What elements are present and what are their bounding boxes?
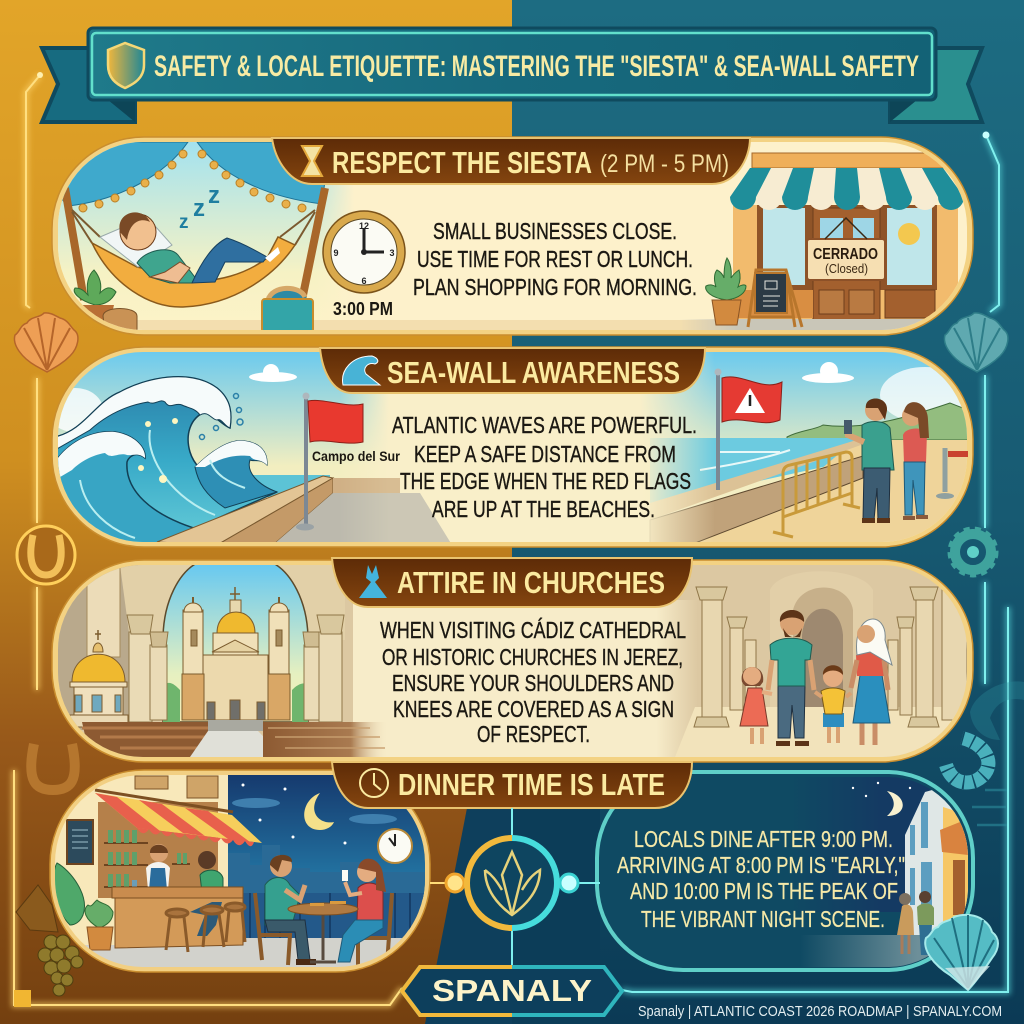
heading: respect the siesta: (2 PM - 5 PM): [600, 150, 729, 178]
panel: dinner text: [597, 772, 973, 970]
illustration: pews: [82, 720, 283, 757]
illustration: distant sea left: [253, 475, 330, 497]
illustration: barrier: [773, 452, 860, 537]
illustration: railing: [240, 893, 428, 940]
body text: churches: [380, 617, 686, 747]
illustration: waves: [55, 377, 277, 545]
clock: 12: [359, 221, 369, 231]
illustration: bartender and customer: [132, 844, 223, 902]
icon: shield: [108, 43, 144, 88]
illustration: hammock: [92, 237, 295, 307]
illustration: right sea and hills: [650, 403, 968, 545]
illustration: chalkboard: [748, 270, 802, 327]
illustration: shop: [730, 153, 964, 320]
illustration: wall clock: [378, 829, 412, 863]
illustration: tourists: [844, 398, 968, 523]
icon: wave: [343, 356, 380, 385]
illustration: couple walking: [897, 891, 934, 955]
icon: blue dress: [359, 565, 387, 598]
emblem disc: [467, 838, 557, 928]
illustration: plants: [54, 863, 113, 950]
illustration: striped canopy: [95, 790, 262, 846]
panel: attire in churches: [52, 558, 973, 762]
body text: sea wall: THE EDGE WHEN THE RED FLAGS: [400, 468, 691, 494]
heading: dinner time is late: DINNER TIME IS LATE: [398, 767, 665, 802]
body text: sea wall: KEEP A SAFE DISTANCE FROM: [414, 441, 676, 467]
body text: dinner: LOCALS DINE AFTER 9:00 PM.: [634, 826, 893, 852]
illustration: columns left: [127, 615, 344, 722]
illustration: bar shelves: [98, 802, 218, 898]
heading: sea-wall awareness: [320, 348, 705, 393]
icon: wave watermark: [970, 681, 1024, 740]
heading: respect the siesta: [272, 138, 750, 184]
ribbon tails: [42, 48, 982, 122]
body text: sea wall: [392, 412, 697, 522]
illustration: chalkboard menu: [67, 820, 93, 864]
icon: large teal shell: [925, 915, 998, 990]
illustration: clouds: [47, 362, 970, 432]
illustration: stars: [852, 782, 911, 797]
illustration: night street: [790, 777, 973, 968]
illustration: right warning flag: [714, 368, 782, 490]
illustration: plant and basket: [74, 270, 313, 332]
body text: dinner: AND 10:00 PM IS THE PEAK OF: [630, 878, 898, 904]
illustration: customer legs front: [190, 902, 222, 936]
illustration: striped awning: [730, 168, 964, 210]
illustration: trees: [163, 683, 308, 722]
panel: sea-wall awareness: [47, 347, 973, 547]
illustration: crescent moon: [887, 791, 903, 816]
icon: shrimp: [946, 738, 988, 783]
clock: 6: [361, 276, 367, 286]
illustration: sleeping man: [100, 212, 280, 283]
illustration: curtains and lights: [58, 142, 330, 212]
sign: closed: CERRADO: [813, 246, 878, 263]
icon: glowing horseshoe: [17, 526, 75, 584]
figure: father: [768, 610, 814, 746]
icon: teal shell right: [944, 313, 1008, 372]
illustration: moon, stars and clouds: [232, 784, 397, 844]
illustration: center cream fade: [340, 352, 715, 542]
banner body: [88, 28, 936, 100]
body text: sea wall: ATLANTIC WAVES ARE POWERFUL.: [392, 412, 697, 438]
illustration: family: [740, 610, 892, 746]
illustration: terrace floor: [85, 938, 402, 967]
illustration: right arches and columns: [675, 571, 968, 757]
emblem mark: [485, 852, 540, 915]
heading: dinner time is late: [332, 762, 692, 808]
body text: siesta: PLAN SHOPPING FOR MORNING.: [413, 274, 697, 300]
panel: dinner scene: [50, 770, 430, 972]
clock: 9: [333, 248, 339, 258]
illustration: bar stools: [166, 903, 245, 952]
illustration: bar counter: [112, 887, 243, 948]
illustration: cathedral: [182, 587, 290, 720]
illustration: potted plant: [706, 258, 746, 325]
title banner ribbon: [42, 28, 982, 122]
body text: churches: WHEN VISITING CÁDIZ CATHEDRAL: [380, 617, 686, 643]
body text: dinner: [617, 826, 905, 932]
illustration: night sky: [228, 775, 428, 900]
banner highlight border: [92, 33, 932, 95]
heading: attire in churches: ATTIRE IN CHURCHES: [397, 565, 665, 600]
sign: closed: [807, 218, 885, 280]
body text: churches: ENSURE YOUR SHOULDERS AND: [392, 670, 674, 696]
illustration: center cream panel: [353, 600, 698, 760]
icon: grapes and leaf: [16, 885, 83, 996]
clock time label: 3:00 PM: [333, 299, 393, 319]
sign: closed: (Closed): [825, 261, 868, 276]
illustration: sleep z letters: z: [179, 212, 188, 233]
illustration: hammock posts: [65, 188, 325, 300]
body text: dinner: ARRIVING AT 8:00 PM IS "EARLY,": [617, 852, 905, 878]
illustration: city silhouette: [228, 845, 428, 900]
body text: siesta: USE TIME FOR REST OR LUNCH.: [417, 246, 693, 272]
heading: attire in churches: [332, 558, 692, 607]
brand badge: SPANALY: [432, 973, 592, 1008]
heading: respect the siesta: RESPECT THE SIESTA: [332, 145, 592, 180]
heading: sea-wall awareness: SEA-WALL AWARENESS: [387, 355, 680, 390]
connector node: teal: [560, 874, 578, 892]
body text: siesta: [413, 218, 697, 300]
icon: gold shell left: [14, 313, 78, 372]
icon: clock outline: [360, 769, 388, 797]
body text: churches: KNEES ARE COVERED AS A SIGN: [393, 696, 674, 722]
illustration: wall: [55, 775, 230, 945]
icon: gear: [950, 529, 996, 575]
body text: siesta: SMALL BUSINESSES CLOSE.: [433, 218, 677, 244]
body text: churches: OR HISTORIC CHURCHES IN JEREZ,: [382, 644, 683, 670]
body text: churches: OF RESPECT.: [477, 721, 590, 747]
illustration: left sea wall: [156, 476, 362, 542]
panel: respect the siesta: [52, 137, 973, 335]
illustration: sleep z letters: z: [193, 195, 205, 222]
body text: dinner: THE VIBRANT NIGHT SCENE.: [641, 906, 885, 932]
illustration: sleep z letters: z: [208, 182, 220, 209]
clock: 3: [389, 248, 395, 258]
illustration: left dome: [70, 630, 128, 727]
figure: mother: [851, 619, 892, 745]
figure: boy: [815, 665, 851, 743]
illustration: sleep z letters: [180, 190, 220, 228]
illustration: left red flag: [296, 392, 363, 530]
clock: [323, 211, 405, 293]
illustration: dining couple: [255, 855, 392, 965]
illustration: left back wall: [58, 565, 138, 730]
connector node: gold: [446, 874, 464, 892]
icon: hourglass: [302, 146, 322, 176]
brand badge: [402, 967, 622, 1015]
icon: copper horseshoe: [31, 744, 75, 790]
illustration: arch with sky: [163, 563, 308, 722]
body text: sea wall: ARE UP AT THE BEACHES.: [432, 496, 655, 522]
figure: girl: [740, 667, 772, 744]
illustration: hammock ropes: [72, 210, 315, 245]
illustration: windows: [135, 776, 218, 798]
central emblem with connectors: [430, 808, 600, 965]
illustration: right pews: [263, 722, 388, 757]
location label: Campo del Sur: [312, 449, 401, 464]
